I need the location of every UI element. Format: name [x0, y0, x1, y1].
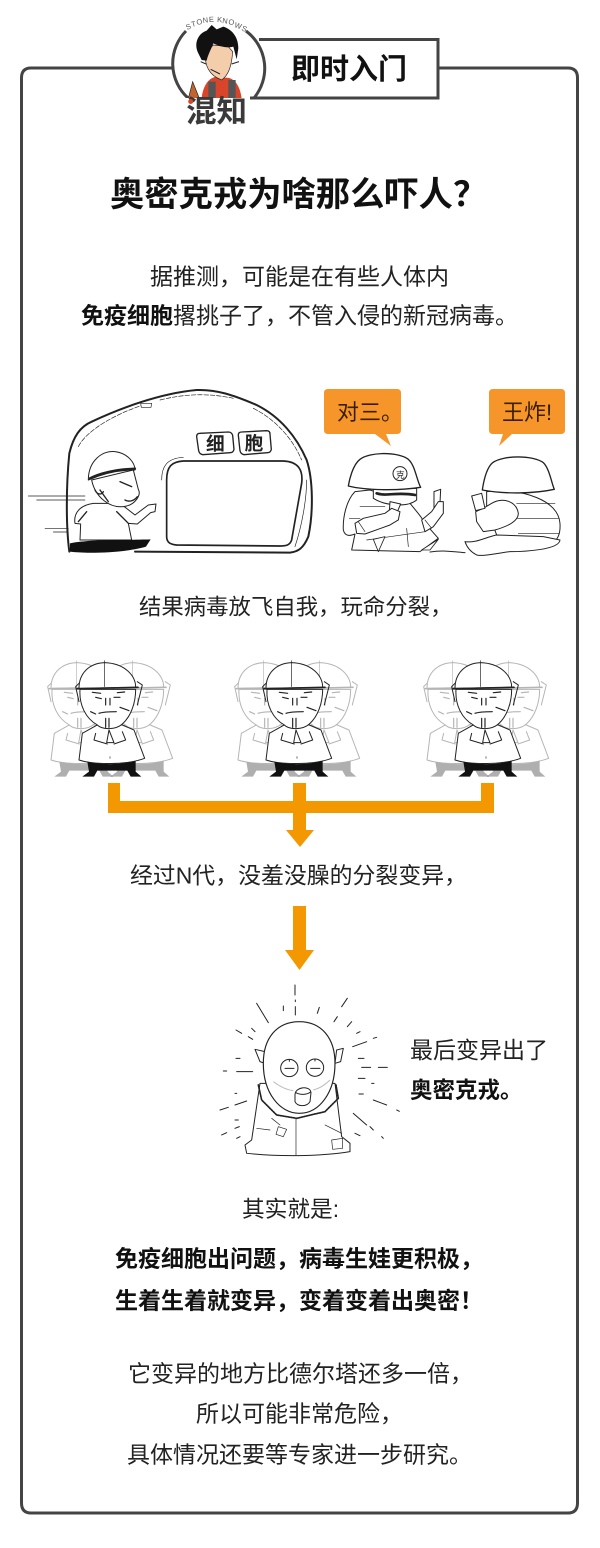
text: mutation over generations: 经过N代，没羞没臊的分裂变异， [130, 862, 467, 888]
summary bold text [115, 1246, 483, 1314]
logo tagline: S [240, 24, 248, 34]
ears [255, 1048, 343, 1064]
running man [70, 451, 156, 553]
omicron text: 奥密克戎。 [410, 1077, 523, 1103]
logo tagline: W [233, 20, 244, 31]
intro text: 据推测，可能是在有些人体内 [150, 264, 449, 290]
illustration: omicron bald man [220, 985, 399, 1156]
virus group 3 [424, 661, 549, 777]
right soldier [465, 457, 560, 555]
logo tagline: O [196, 17, 203, 27]
logo badge [173, 15, 265, 129]
head [263, 1022, 335, 1113]
header label box [250, 40, 438, 98]
closing text [127, 1360, 473, 1468]
logo tagline: E [209, 15, 214, 24]
radiating lines [220, 985, 399, 1138]
virus group 2 [235, 661, 360, 777]
coat [245, 1083, 350, 1156]
logo tagline: N [202, 15, 209, 25]
logo tagline: N [222, 16, 228, 26]
intro text [81, 264, 518, 328]
summary bold text: 生着生着就变异，变着变着出奥密！ [115, 1288, 483, 1314]
header title: 即时入门 [291, 53, 407, 86]
virus group 1 [48, 661, 173, 777]
logo tagline: K [217, 15, 222, 24]
closing text: 所以可能非常危险， [196, 1400, 403, 1426]
logo tagline: O [228, 17, 235, 27]
speech bubble: 王炸 [489, 389, 565, 446]
down arrow [285, 906, 314, 970]
cell sign: 细 [206, 434, 225, 455]
mouth [295, 1088, 311, 1106]
main title: 奥密克戎为啥那么吓人？ [110, 176, 487, 214]
intro text: 免疫细胞撂挑子了，不管入侵的新冠病毒。 [81, 302, 518, 328]
logo tagline: T [190, 19, 197, 29]
logo avatar [188, 25, 242, 98]
summary bold text: 免疫细胞出问题，病毒生娃更积极， [115, 1246, 483, 1272]
logo tagline: S [184, 22, 192, 32]
closing text: 具体情况还要等专家进一步研究。 [127, 1442, 472, 1468]
illustration: three groups of replicating viruses [48, 661, 549, 777]
cell sign [197, 431, 271, 455]
summary lead-in: 其实就是: [242, 1196, 339, 1222]
speed lines [28, 496, 85, 532]
closing text: 它变异的地方比德尔塔还多一倍， [128, 1360, 473, 1386]
omicron text [410, 1037, 548, 1103]
cell sign: 胞 [245, 433, 264, 454]
merging arrow [108, 783, 494, 847]
left soldier [343, 454, 465, 553]
eyes [281, 1059, 298, 1077]
omicron text: 最后变异出了 [410, 1037, 548, 1063]
illustration: soldiers playing cards [343, 454, 560, 555]
logo wordmark: 混知 [186, 95, 247, 129]
left soldier: 克 [396, 470, 405, 480]
illustration: cell with man running away [28, 390, 312, 553]
speech bubble: 对三: 对三。 [337, 400, 403, 425]
cell outline [67, 390, 312, 553]
speech bubble: 对三 [324, 389, 403, 446]
cell window [167, 461, 302, 546]
speech bubble: 王炸: 王炸! [502, 400, 552, 425]
text: virus goes wild: 结果病毒放飞自我，玩命分裂， [139, 594, 452, 620]
